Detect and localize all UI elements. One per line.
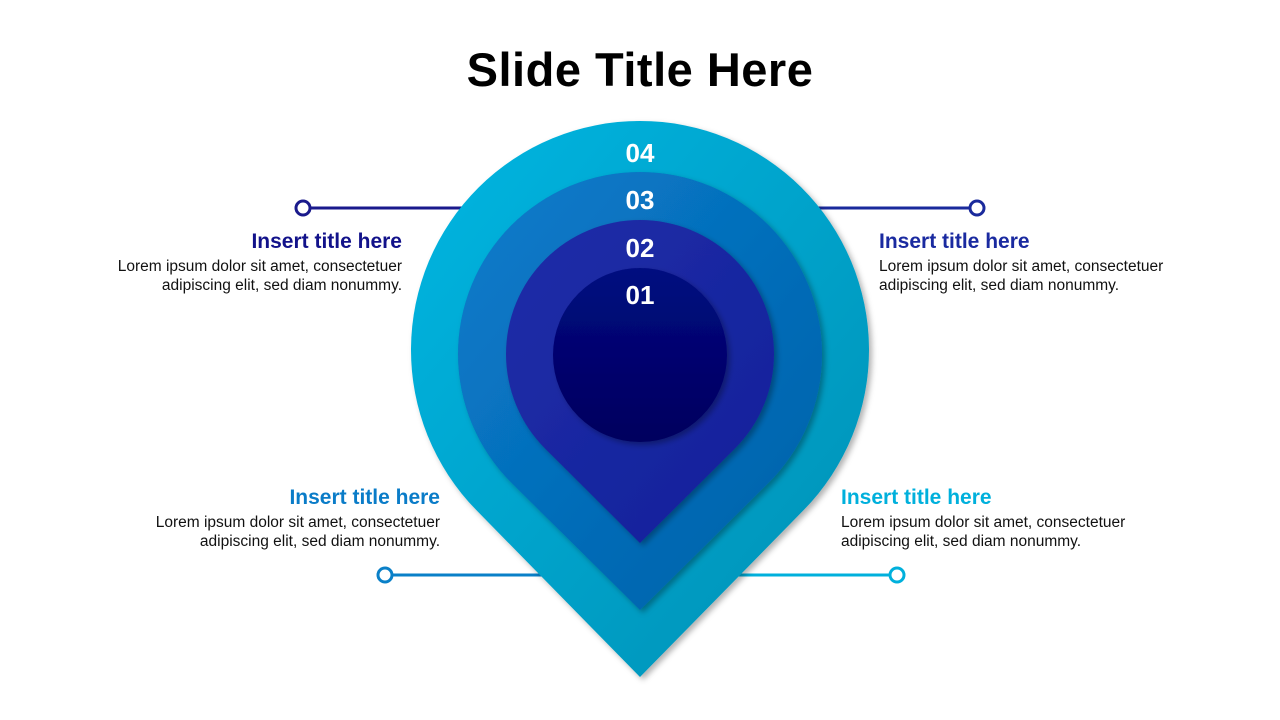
text: top left: Lorem ipsum dolor sit amet, consectetuer [118,258,402,275]
title: Slide Title Here [467,43,813,96]
text: top left [118,230,402,294]
numbers [626,138,655,310]
text: top right: Insert title here [879,230,1030,253]
text: top right: Lorem ipsum dolor sit amet, consectetuer [879,258,1163,275]
text: bottom right: adipiscing elit, sed diam nonummy. [841,533,1081,550]
text: top left: adipiscing elit, sed diam nonummy. [162,277,402,294]
text: bottom right [841,486,1126,550]
layer 02 [506,220,774,543]
text: bottom right: Insert title here [841,486,992,509]
text: top right: adipiscing elit, sed diam nonummy. [879,277,1119,294]
layer 03 [458,172,822,610]
numbers: 02 [626,233,654,263]
numbers: 01 [626,280,654,310]
text: bottom left: Lorem ipsum dolor sit amet, consectetuer [156,514,440,531]
numbers: 04 [626,138,655,168]
text: bottom right: Lorem ipsum dolor sit amet, consectetuer [841,514,1125,531]
text: top right [879,230,1164,294]
layer 01 [553,268,727,442]
connector lines [296,201,984,582]
text: bottom left [156,486,440,550]
text: top left: Insert title here [251,230,402,253]
text: bottom left: Insert title here [289,486,440,509]
text: bottom left: adipiscing elit, sed diam nonummy. [200,533,440,550]
numbers: 03 [626,185,654,215]
layer 04 [411,121,869,677]
